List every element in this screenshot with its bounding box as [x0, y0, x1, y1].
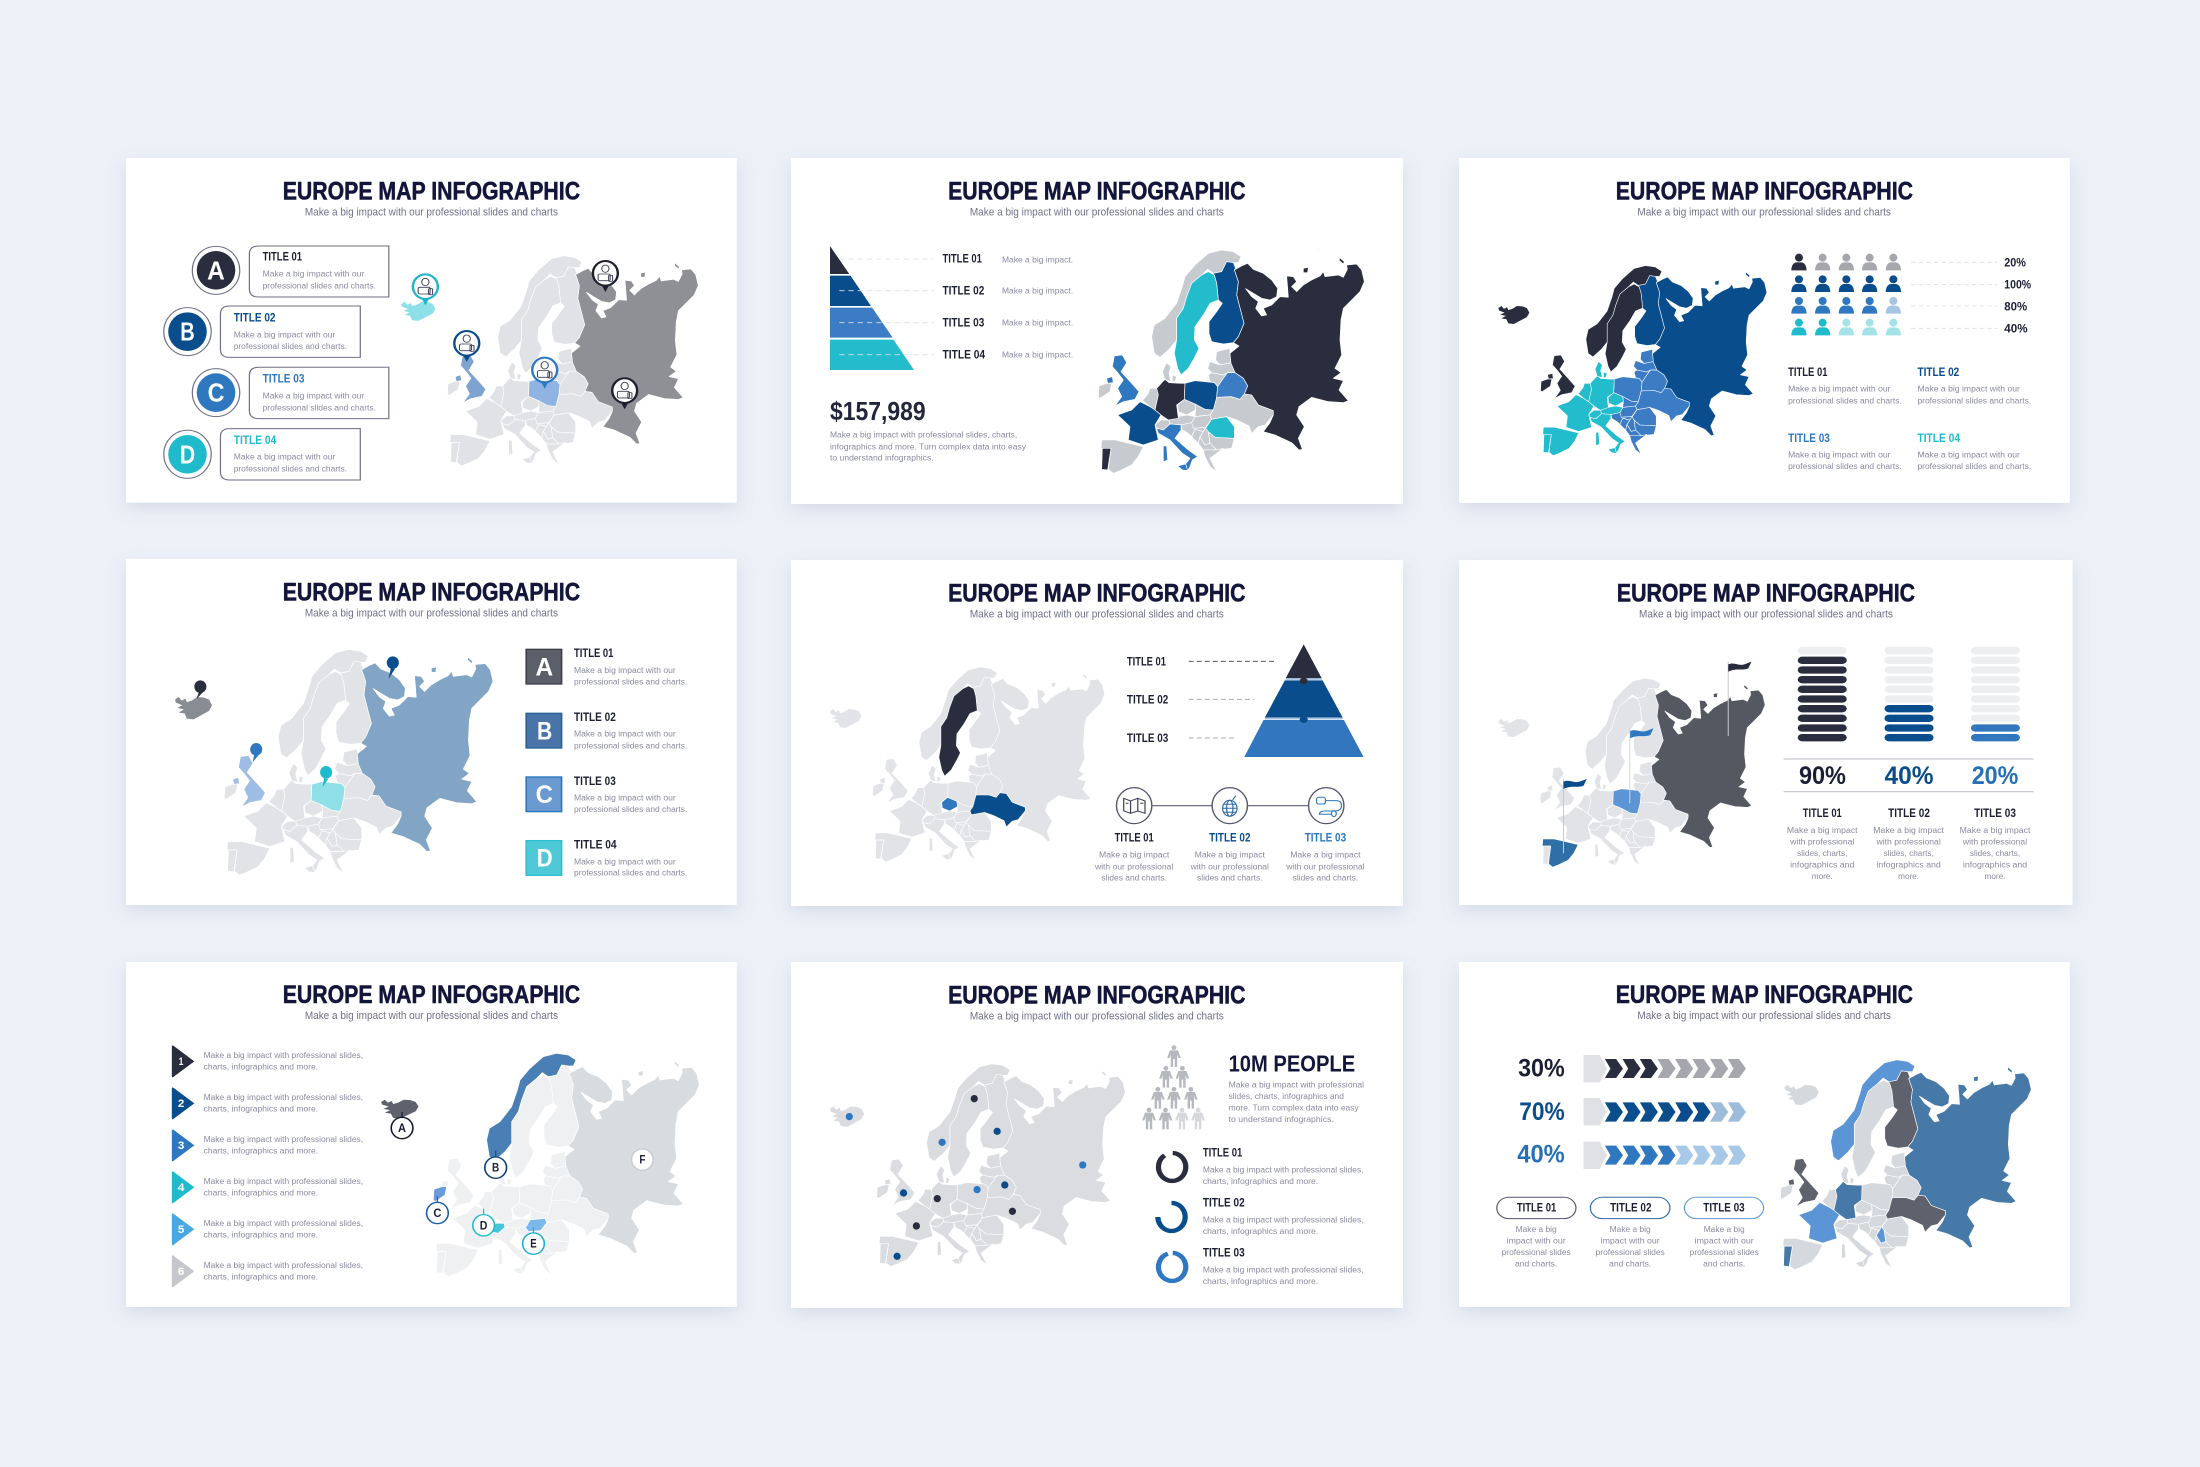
title: EUROPE MAP INFOGRAPHIC — [283, 980, 580, 1008]
title: EUROPE MAP INFOGRAPHIC — [283, 177, 580, 205]
map pin: northern Russia — [593, 261, 618, 292]
chevron row 2 — [1584, 1098, 1746, 1125]
list item 3: TITLE 03 — [574, 774, 616, 788]
subtitle: Make a big impact with our professional slides and charts — [305, 1009, 558, 1022]
pill block 3 — [1684, 1197, 1764, 1268]
donut text 2 — [1203, 1195, 1364, 1236]
column text 1: more. — [1812, 872, 1833, 881]
title: EUROPE MAP INFOGRAPHIC — [948, 981, 1245, 1009]
flag: Poland — [1630, 728, 1653, 803]
callout box 4 — [220, 429, 360, 480]
flag: Spain — [1563, 779, 1587, 853]
big number: $157,989 — [830, 397, 926, 426]
column text 1: with professional — [1789, 837, 1854, 846]
marker E — [523, 1227, 544, 1254]
donut text 3: TITLE 03 — [1203, 1245, 1245, 1259]
pill block 1 — [1497, 1197, 1576, 1268]
subtitle: Make a big impact with our professional slides and charts — [1639, 607, 1893, 620]
title: EUROPE MAP INFOGRAPHIC — [948, 177, 1245, 205]
percentages: 20% — [1972, 761, 2018, 789]
list row 1 — [172, 1045, 363, 1077]
pill block 1: professional slides — [1502, 1248, 1571, 1257]
map of Europe — [433, 1050, 699, 1277]
list row 2: charts, infographics and more. — [204, 1104, 318, 1113]
column text 1 — [1787, 806, 1858, 881]
triangle label 4: Make a big impact. — [1002, 350, 1073, 359]
list row 3 — [172, 1129, 363, 1161]
map of Europe — [1541, 263, 1767, 456]
text block 2: professional slides and charts. — [1917, 396, 2031, 405]
slide background — [126, 158, 737, 503]
pin: Iceland — [194, 680, 206, 699]
icon: Iceland — [1784, 1085, 1819, 1105]
badge A: A — [207, 257, 225, 286]
triangle label 1 — [943, 252, 1073, 265]
text block 3: TITLE 03 — [1788, 431, 1830, 445]
list row 3: Make a big impact with professional slides, — [204, 1135, 363, 1144]
column text 3: Make a big impact — [1960, 826, 2031, 835]
percentages: 40% — [1885, 761, 1934, 789]
list row 4: charts, infographics and more. — [204, 1188, 318, 1197]
pill block 1: and charts. — [1515, 1259, 1557, 1268]
list item 4 — [574, 838, 687, 877]
title: EUROPE MAP INFOGRAPHIC — [283, 578, 580, 606]
list item 1: Make a big impact with our — [574, 666, 676, 675]
list row 3: charts, infographics and more. — [204, 1146, 318, 1155]
icon: Iceland — [401, 302, 435, 321]
badge D: D — [180, 441, 195, 470]
bar chart column 3 — [1971, 647, 2020, 741]
icon: Iceland — [381, 1100, 419, 1119]
list row 6 — [172, 1255, 363, 1287]
square badge D — [526, 841, 562, 875]
list row 1: charts, infographics and more. — [204, 1062, 318, 1071]
column text 2: Make a big impact — [1873, 826, 1944, 835]
map of Europe — [1098, 247, 1364, 473]
column text 3: TITLE 03 — [1974, 806, 2016, 820]
column text 2: infographics and — [1876, 860, 1941, 869]
slide background — [126, 559, 737, 905]
description — [830, 430, 1026, 462]
text block 2 — [1917, 365, 2031, 405]
pyramid label 2 — [1127, 692, 1254, 706]
timeline item 1: Make a big impact — [1099, 850, 1170, 859]
list row 4: Make a big impact with professional slides, — [204, 1177, 363, 1186]
slide background — [791, 962, 1403, 1308]
donut chart 2 — [1158, 1203, 1185, 1231]
list item 2 — [574, 710, 687, 750]
pin: Poland — [320, 766, 332, 787]
list row 5 — [172, 1213, 363, 1245]
pill block 2: and charts. — [1609, 1259, 1651, 1268]
callout box 3: Make a big impact with our — [263, 391, 364, 400]
callout box 1: Make a big impact with our — [263, 269, 364, 278]
list row 1: Make a big impact with professional slides, — [204, 1051, 363, 1060]
column text 2: with professional — [1876, 837, 1941, 846]
people description — [1229, 1080, 1364, 1124]
list row 4 — [172, 1171, 363, 1203]
bar chart column 1 — [1798, 647, 1847, 741]
donut text 1 — [1203, 1145, 1364, 1186]
pill block 1: Make a big — [1516, 1225, 1557, 1234]
list row 2 — [172, 1087, 363, 1119]
square badge C — [526, 777, 562, 812]
text block 1: TITLE 01 — [1788, 365, 1827, 379]
pyramid label 1: TITLE 01 — [1127, 654, 1166, 668]
subtitle: Make a big impact with our professional slides and charts — [970, 1009, 1224, 1022]
donut text 3: Make a big impact with professional slides, — [1203, 1265, 1364, 1274]
donut text 1: TITLE 01 — [1203, 1145, 1242, 1159]
icon: Iceland — [830, 709, 861, 728]
text block 4: professional slides and charts. — [1917, 462, 2031, 471]
marker A — [391, 1112, 413, 1139]
list item 3: Make a big impact with our — [574, 793, 676, 802]
callout box 2: Make a big impact with our — [234, 330, 335, 339]
timeline item 2: slides and charts. — [1197, 873, 1263, 882]
square badge B — [526, 713, 562, 748]
pill block 2: impact with our — [1601, 1236, 1660, 1245]
column text 2: slides, charts, — [1884, 849, 1934, 858]
pill block 2: Make a big — [1610, 1225, 1651, 1234]
pyramid label 2: TITLE 02 — [1127, 692, 1168, 706]
list item 4: TITLE 04 — [574, 838, 617, 851]
donut text 2: charts, infographics and more. — [1203, 1227, 1318, 1236]
people description: more. Turn complex data into easy — [1229, 1103, 1359, 1112]
list row 4: 4 — [178, 1181, 185, 1194]
percentage values: 20% — [2004, 256, 2026, 269]
slide background — [791, 560, 1403, 906]
column text 3: slides, charts, — [1970, 849, 2020, 858]
text block 3: Make a big impact with our — [1788, 450, 1891, 459]
timeline item 1: TITLE 01 — [1115, 831, 1154, 844]
percentage 40: 40% — [1517, 1140, 1565, 1168]
triangle label 3: Make a big impact. — [1002, 318, 1073, 327]
marker E: E — [530, 1237, 537, 1250]
icon: route car — [1309, 788, 1344, 824]
pill block 2: TITLE 02 — [1610, 1201, 1651, 1214]
percentage values: 40% — [2004, 321, 2028, 335]
square badge B: B — [537, 717, 552, 745]
pill block 2: professional slides — [1596, 1248, 1665, 1257]
pin: Russia — [387, 656, 399, 679]
list item 4: Make a big impact with our — [574, 857, 676, 866]
percentage values: 100% — [2004, 277, 2032, 291]
slide background — [1459, 962, 2070, 1307]
icon: Iceland — [175, 697, 212, 719]
square badge D: D — [537, 844, 553, 872]
list item 2: TITLE 02 — [574, 710, 616, 724]
donut text 2: Make a big impact with professional slides, — [1203, 1215, 1364, 1224]
triangle label 2: TITLE 02 — [943, 283, 984, 297]
slide background — [1459, 560, 2073, 905]
text block 2: TITLE 02 — [1917, 365, 1959, 379]
slide background — [791, 158, 1403, 504]
callout box 3: professional slides and charts. — [263, 403, 376, 412]
text block 4 — [1917, 431, 2031, 471]
list item 1 — [574, 646, 687, 686]
triangle label 1: TITLE 01 — [943, 252, 982, 265]
map of Europe — [877, 1061, 1125, 1267]
timeline item 2: TITLE 02 — [1209, 831, 1250, 844]
text block 3 — [1788, 431, 1902, 471]
square badge C: C — [536, 780, 553, 808]
timeline item 2 — [1190, 831, 1269, 882]
triangle label 3 — [943, 315, 1073, 329]
list item 1: TITLE 01 — [574, 646, 613, 660]
map of Europe — [1780, 1057, 2031, 1270]
bar chart column 2 — [1885, 647, 1934, 741]
donut text 1: Make a big impact with professional slides, — [1203, 1165, 1364, 1174]
pill block 3: and charts. — [1703, 1259, 1745, 1268]
triangle label 3: TITLE 03 — [943, 315, 984, 329]
callout box 2: TITLE 02 — [234, 310, 275, 324]
callout box 2 — [220, 306, 360, 357]
timeline item 3: TITLE 03 — [1305, 831, 1346, 844]
title: EUROPE MAP INFOGRAPHIC — [1617, 579, 1915, 607]
percentages — [1799, 761, 2018, 789]
badge B — [164, 308, 211, 356]
chevron row 1 — [1584, 1055, 1746, 1082]
marker D: D — [480, 1218, 488, 1232]
donut text 3: charts, infographics and more. — [1203, 1277, 1318, 1286]
stepped triangle chart — [830, 246, 934, 370]
donut text 2: TITLE 02 — [1203, 1195, 1245, 1209]
list row 5: Make a big impact with professional slides, — [204, 1219, 363, 1228]
donut text 3 — [1203, 1245, 1364, 1286]
flag: Russia — [1728, 662, 1752, 736]
column text 3: infographics and — [1963, 860, 2027, 869]
marker F: F — [639, 1153, 645, 1166]
list item 3: professional slides and charts. — [574, 805, 687, 814]
timeline item 3: Make a big impact — [1290, 850, 1361, 859]
pill block 1: impact with our — [1507, 1236, 1566, 1245]
pill block 3: professional slides — [1690, 1248, 1759, 1257]
panel: slide 2 stepped triangle and revenue — [791, 158, 1403, 504]
text block 4: TITLE 04 — [1917, 431, 1961, 445]
pill block 3: TITLE 03 — [1703, 1201, 1745, 1214]
callout box 4: Make a big impact with our — [234, 452, 335, 461]
timeline item 3 — [1285, 831, 1365, 882]
people chart row 2 — [1791, 275, 1901, 292]
icon: Iceland — [830, 1107, 864, 1127]
description: Make a big impact with professional slides, charts, — [830, 430, 1017, 439]
panel: slide 9 chevron progress — [1459, 962, 2070, 1307]
people chart row 4 — [1791, 319, 1901, 335]
text block 2: Make a big impact with our — [1917, 384, 2020, 393]
chevron row 3 — [1584, 1142, 1746, 1169]
percentage 70: 70% — [1519, 1097, 1565, 1125]
column text 3: with professional — [1962, 837, 2027, 846]
list row 5: 5 — [178, 1223, 185, 1236]
map pin: Poland — [532, 358, 557, 389]
panel: slide 1 lettered callouts with map pins — [126, 158, 737, 503]
map of Europe — [447, 253, 698, 466]
donut chart 3 — [1158, 1253, 1186, 1281]
column text 3: more. — [1985, 872, 2005, 881]
list item 2: Make a big impact with our — [574, 729, 676, 738]
list row 3: 3 — [178, 1139, 185, 1152]
timeline item 2: Make a big impact — [1195, 850, 1265, 859]
triangle label 1: Make a big impact. — [1002, 255, 1073, 264]
map of Europe — [224, 646, 493, 875]
text block 1 — [1788, 365, 1902, 405]
marker B: B — [492, 1161, 499, 1174]
map pin: Iceland — [413, 274, 438, 305]
list row 1: 1 — [179, 1055, 184, 1068]
people description: slides, charts, infographics and — [1229, 1092, 1344, 1101]
marker C — [427, 1196, 448, 1224]
text block 3: professional slides and charts. — [1788, 462, 1902, 471]
timeline item 1: with our professional — [1094, 862, 1173, 871]
people chart row 3 — [1791, 297, 1901, 314]
text block 4: Make a big impact with our — [1917, 450, 2020, 459]
title: EUROPE MAP INFOGRAPHIC — [948, 579, 1245, 607]
donut text 1: charts, infographics and more. — [1203, 1177, 1318, 1186]
callout box 1 — [249, 246, 389, 297]
percentage values — [2004, 256, 2032, 335]
list row 6: charts, infographics and more. — [204, 1272, 318, 1281]
pyramid chart — [1244, 644, 1364, 757]
pill block 1: TITLE 01 — [1517, 1201, 1556, 1214]
square badge A — [526, 649, 562, 684]
timeline item 3: slides and charts. — [1293, 873, 1358, 882]
subtitle: Make a big impact with our professional slides and charts — [970, 607, 1224, 620]
column text 1: TITLE 01 — [1803, 806, 1842, 820]
pyramid label 3: TITLE 03 — [1127, 731, 1168, 745]
people description: Make a big impact with professional — [1229, 1080, 1364, 1089]
badge C — [192, 369, 240, 417]
pyramid label 3 — [1127, 731, 1237, 745]
column text 3 — [1960, 806, 2031, 881]
column text 2 — [1873, 806, 1944, 881]
map pin: southern Russia — [612, 378, 637, 409]
percentage values: 80% — [2004, 299, 2028, 313]
column text 2: TITLE 02 — [1888, 806, 1930, 820]
callout box 3: TITLE 03 — [263, 372, 304, 385]
headline: 10M people: 10M PEOPLE — [1229, 1051, 1355, 1077]
icon: globe — [1212, 788, 1247, 824]
badge C: C — [208, 379, 224, 408]
subtitle: Make a big impact with our professional slides and charts — [305, 205, 558, 218]
marker B — [485, 1151, 507, 1178]
marker F — [631, 1149, 653, 1170]
list row 5: charts, infographics and more. — [204, 1230, 318, 1239]
text block 1: Make a big impact with our — [1788, 384, 1891, 393]
callout box 1: TITLE 01 — [263, 250, 302, 263]
callout box 3 — [249, 367, 389, 419]
panel: slide 4 square letter list — [126, 559, 737, 905]
callout box 2: professional slides and charts. — [234, 342, 347, 351]
subtitle: Make a big impact with our professional slides and charts — [1637, 1009, 1891, 1022]
pin: United Kingdom — [250, 743, 262, 762]
subtitle: Make a big impact with our professional slides and charts — [305, 606, 558, 619]
people pyramid icon — [1142, 1045, 1205, 1129]
subtitle: Make a big impact with our professional slides and charts — [1637, 205, 1891, 218]
column text 2: more. — [1898, 872, 1919, 881]
callout box 4: TITLE 04 — [234, 433, 277, 447]
icon: Iceland — [1498, 306, 1529, 324]
badge B: B — [180, 318, 195, 347]
badge D — [164, 430, 211, 478]
subtitle: Make a big impact with our professional slides and charts — [970, 205, 1224, 218]
title: EUROPE MAP INFOGRAPHIC — [1616, 177, 1913, 205]
icon: map — [1116, 788, 1152, 824]
map of Europe — [1540, 675, 1765, 867]
panel: slide 7 numbered arrows and lettered markers — [126, 962, 737, 1307]
marker A: A — [398, 1121, 406, 1135]
slide background — [1459, 158, 2070, 503]
map pin: United Kingdom — [454, 331, 479, 362]
list row 6: Make a big impact with professional slides, — [204, 1261, 363, 1270]
panel: slide 6 stacked bars with flags — [1459, 560, 2073, 905]
timeline item 1 — [1094, 831, 1173, 882]
pill block 3: Make a big — [1704, 1225, 1745, 1234]
list row 2: Make a big impact with professional slides, — [204, 1093, 363, 1102]
panel: slide 5 pyramid and timeline — [791, 560, 1403, 906]
panel: slide 8 people pyramid and donuts — [791, 962, 1403, 1308]
slide background — [126, 962, 737, 1307]
column text 1: infographics and — [1790, 860, 1854, 869]
pill block 3: impact with our — [1695, 1236, 1754, 1245]
timeline item 3: with our professional — [1285, 862, 1365, 871]
badge A — [192, 246, 240, 294]
title: EUROPE MAP INFOGRAPHIC — [1616, 980, 1913, 1008]
location dots — [846, 1095, 1086, 1260]
donut chart 1 — [1158, 1153, 1186, 1181]
list row 2: 2 — [178, 1097, 185, 1110]
percentages: 90% — [1799, 761, 1846, 789]
timeline item 1: slides and charts. — [1101, 873, 1167, 882]
callout box 1: professional slides and charts. — [263, 281, 376, 290]
list item 3 — [574, 774, 687, 814]
marker D — [473, 1209, 494, 1236]
panel: slide 3 people chart — [1459, 158, 2070, 503]
triangle label 2: Make a big impact. — [1002, 286, 1073, 295]
description: infographics and more. Turn complex data into easy — [830, 442, 1026, 451]
callout box 4: professional slides and charts. — [234, 464, 347, 473]
map of Europe — [872, 664, 1105, 862]
percentage 30: 30% — [1518, 1054, 1565, 1082]
list item 1: professional slides and charts. — [574, 677, 687, 686]
icon: Iceland — [1498, 719, 1529, 737]
people description: to understand infographics. — [1229, 1115, 1334, 1124]
square badge A: A — [535, 653, 553, 681]
description: to understand infographics. — [830, 453, 934, 462]
column text 1: slides, charts, — [1797, 849, 1847, 858]
list item 2: professional slides and charts. — [574, 741, 687, 750]
people chart row 1 — [1791, 254, 1901, 270]
pill block 2 — [1590, 1197, 1670, 1268]
triangle label 4 — [943, 347, 1073, 361]
text block 1: professional slides and charts. — [1788, 396, 1902, 405]
list item 4: professional slides and charts. — [574, 868, 687, 877]
marker C: C — [433, 1206, 442, 1220]
column text 1: Make a big impact — [1787, 826, 1858, 835]
triangle label 2 — [943, 283, 1073, 297]
timeline item 2: with our professional — [1190, 862, 1269, 871]
list row 6: 6 — [178, 1265, 185, 1278]
triangle label 4: TITLE 04 — [943, 347, 986, 361]
